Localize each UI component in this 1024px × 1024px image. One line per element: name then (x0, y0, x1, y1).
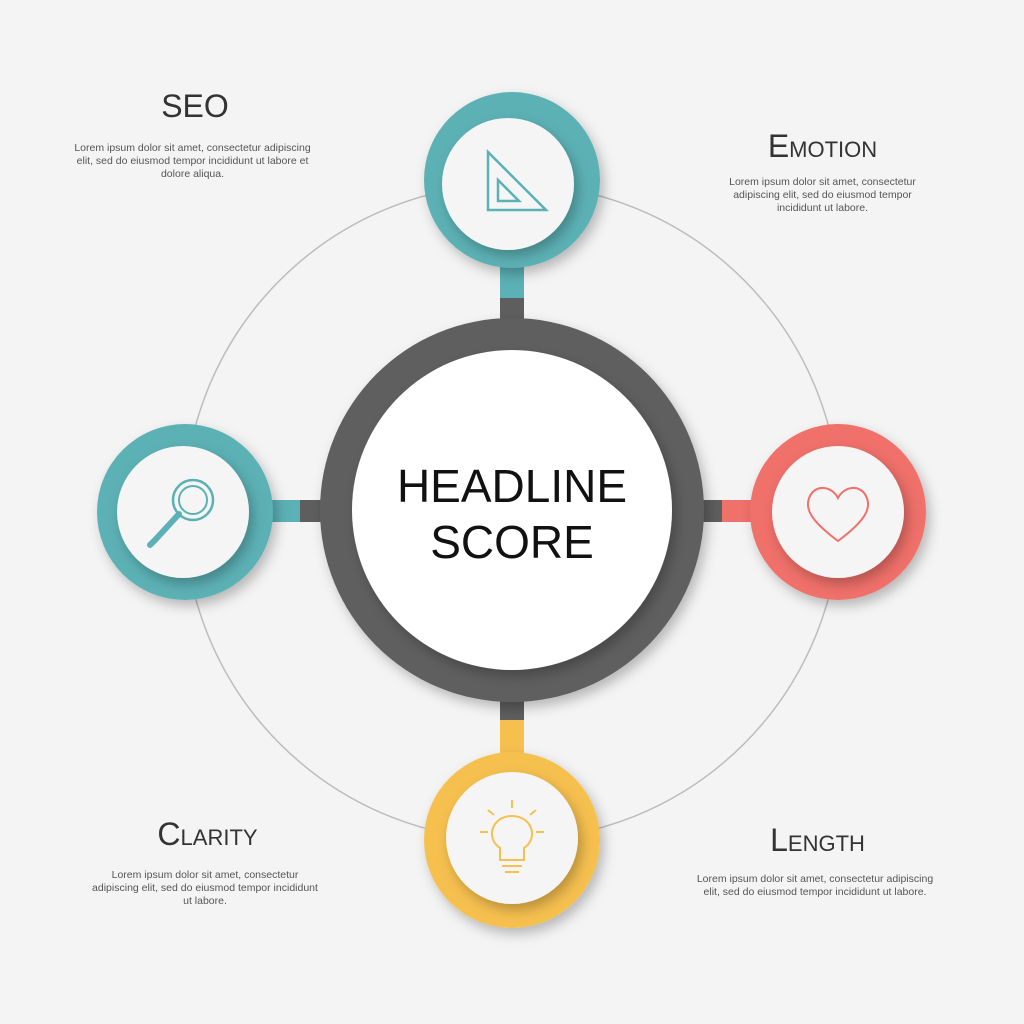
text: Clarity: Lorem ipsum dolor sit amet, consectetur adipiscing elit, sed do eiusmod tempor incididunt ut labore. (92, 869, 318, 907)
connector: right (696, 500, 758, 522)
connector: top (500, 260, 524, 328)
text: Length: Lorem ipsum dolor sit amet, consectetur adipiscing elit, sed do eiusmod tempor incididunt ut labore. (697, 873, 933, 898)
connector: bottom (500, 695, 524, 760)
text: Emotion: Lorem ipsum dolor sit amet, consectetur adipiscing elit, sed do eiusmod tempor incididunt ut labore. (729, 176, 916, 214)
heading: Emotion: Emotion (768, 128, 877, 164)
central hub: SCORE (430, 516, 594, 568)
node: top (triangle ruler) (424, 92, 600, 268)
node: bottom (light bulb) (424, 752, 600, 928)
heading: Clarity: Clarity (157, 816, 258, 852)
connector: left (265, 500, 328, 522)
heading: SEO: SEO (161, 88, 229, 124)
node: right (heart) (750, 424, 926, 600)
central hub: HEADLINE (397, 460, 627, 512)
text: SEO: Lorem ipsum dolor sit amet, consectetur adipiscing elit, sed do eiusmod tempor incididunt ut labore et dolore aliqua. (74, 142, 311, 180)
heading: Length: Length (770, 822, 865, 858)
central hub (320, 318, 704, 702)
node: left (magnifier) (97, 424, 273, 600)
